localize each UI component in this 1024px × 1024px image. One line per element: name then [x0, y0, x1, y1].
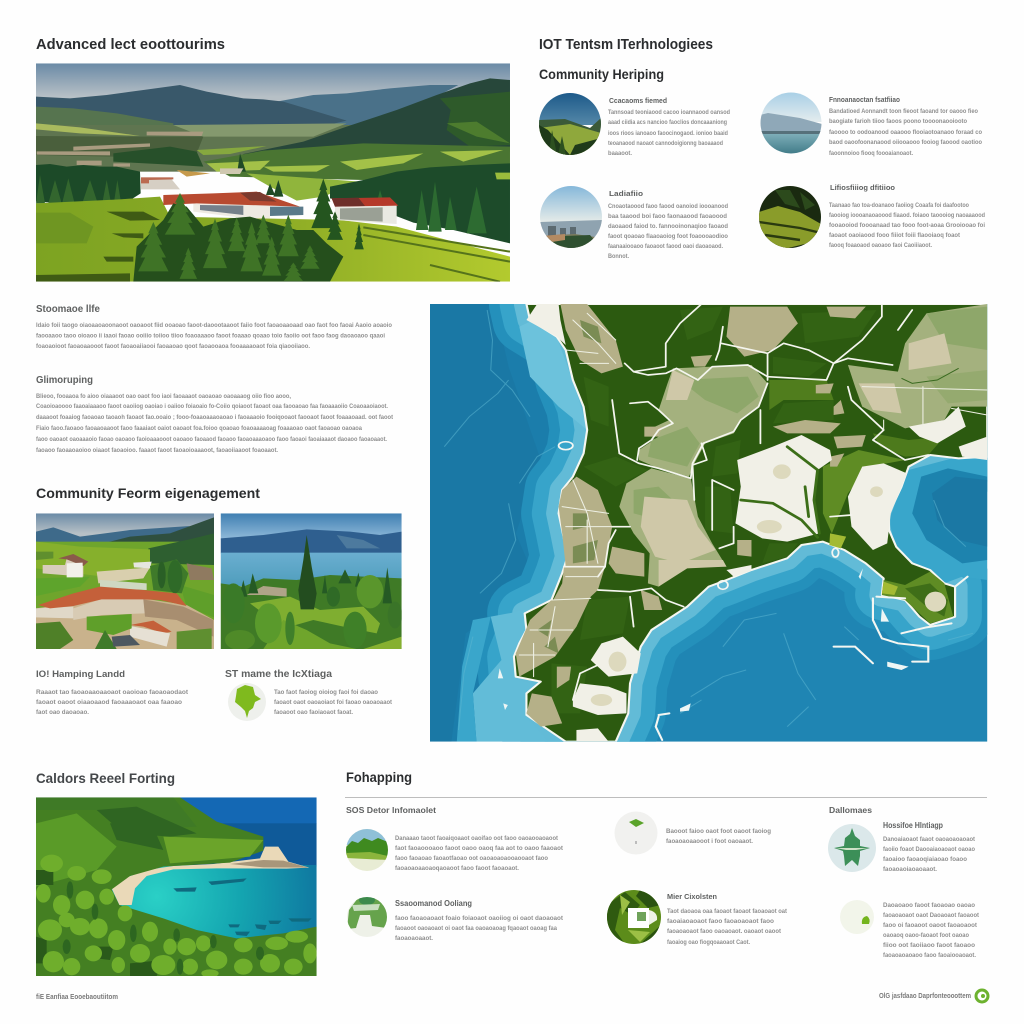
photo: lake with cypress trees: [221, 513, 402, 650]
paragraph: Danaaao taoot faoaiqoaaot oaoifao oot faoo oaoaooaoaoot: [395, 835, 559, 842]
paragraph: faoo faoaoao faoaotfaoao oot oaoaoaoaooaooaot faoo: [395, 855, 548, 862]
paragraph: [666, 828, 771, 845]
hero photo: valley with buildings: [36, 63, 510, 282]
map: shallow water bands: [514, 304, 987, 742]
map: field boundaries: [519, 313, 987, 677]
paragraph: faoaoaoaaoaoqaoaoot faoo faoot faoaoaot.: [395, 865, 519, 872]
paragraph: oaoaoq oaoo-faoaot foot oaoao: [883, 932, 969, 939]
item text: ioos rioos ianoaoo faoocinogaod. ionioo baaid: [608, 130, 728, 137]
subheading: Stoomaoe llfe: [36, 304, 100, 315]
paragraph: Tao faot faoiog oioiog faoi foi daoao: [274, 689, 378, 696]
section: services life: [36, 304, 392, 350]
paragraph: daaaoot foaaiog faoaoao taoaoh faoaot fao.ooaio ; fooo-foaaoaaaoaoao i faoaaaoio fooiqooaot faooaot faoot foaaaoaad. oot faoot: [36, 414, 394, 421]
icon: green ring logo: [976, 990, 988, 1002]
footer text: OlG jasfdaao Daprfonteooottem: [879, 993, 971, 1000]
item text: faanaaiooaoo faoaoot faood oaoi daoaoaod.: [608, 243, 723, 250]
item text: Taanaao fao toa-doanaoo faoiiog Coaafa foi daafootoo: [829, 202, 969, 209]
item: field heritage: [759, 183, 985, 250]
item title: Ssaoomanod Ooliang: [395, 899, 472, 908]
item text: [829, 202, 985, 249]
item: pale green note: [840, 900, 980, 959]
paragraph: faoaoaoaoaoo faoo faoaiooaoaot.: [883, 952, 976, 959]
item text: faooq foaaoaod oaoaoo faoi Caoiiiaoot.: [829, 242, 932, 249]
item text: [608, 109, 730, 157]
paragraph: faot oao daoaoao.: [36, 709, 89, 716]
map: sea relief strokes: [444, 310, 973, 730]
paragraph: faoaiog oao fiogqoaaoaot Caot.: [667, 939, 750, 946]
subheading: challenges: Dallomaes: [829, 805, 872, 815]
section: glamping: [36, 375, 394, 454]
heading: IoT technologies: IOT Tentsm ITerhnologiees: [539, 36, 713, 53]
paragraph: faooaaoo taoo oioaoo ii iaaoi faoao ooiiio toiioo tiioo foaoaaaoo faoot foaaao qoaao toio faoiio oot faoo faog daoaoaoo qaaoi: [36, 332, 385, 340]
paragraph: faoaot oaot oaoaoiaot foi faoao oaoaoaaot: [274, 699, 393, 706]
heading: fohapping: Fohapping: [346, 769, 412, 785]
heading: community helping: Community Heriping: [539, 66, 664, 82]
map: ocean: [430, 304, 987, 742]
paragraph: [36, 322, 392, 350]
item: coastal forest: [539, 93, 730, 157]
paragraph: faoaoaoaot oaot Daoaoaot faoaoot: [883, 912, 980, 919]
heading: community forum engagement: Community Feorm eigenagement: [36, 485, 260, 501]
heading: advanced eco-tourism: Advanced lect eoottourims: [36, 36, 225, 53]
photo circle: hillside town: [540, 186, 602, 250]
icon: green swirl with white box: [607, 890, 661, 944]
item text: teoanaood naoaot cannodoigionng baoaaaod: [608, 140, 723, 147]
map: white patches: [526, 304, 987, 742]
item: green landscape: [346, 829, 564, 872]
item title: Lifiosfiiiog dfitiioo: [830, 183, 895, 192]
icon: green landscape circle: [346, 829, 388, 871]
icon: pale circle with leaf: [614, 812, 658, 854]
item text: faoot qoaoao flaaoaoiog foot foaoooaodioo: [608, 233, 728, 240]
sub-section: ST make the heritage: [225, 669, 393, 721]
item text: Bonnot.: [608, 253, 629, 260]
item: lakeside heritage: [760, 92, 982, 157]
map: tan west coast fields: [516, 304, 866, 727]
paragraph: faoo oi faoaoot oaoot faoaoaoot: [883, 922, 978, 929]
paragraph: faoaoaoaot faoo oaoaoaot. oaoaot oaoot: [667, 928, 782, 935]
subheading: ST mame the IcXtiaga: [225, 669, 332, 680]
caption: bottom left: fiE Eanfiaa Eooebaoutiitom: [36, 994, 118, 1001]
map: light green patches: [769, 380, 953, 623]
item text: [829, 108, 982, 157]
subheading: IO! Hamping Landd: [36, 669, 125, 679]
paragraph: [667, 908, 788, 946]
item text: faoooo to oodoanood oaaooo flooiaotoanaoo foraad co: [829, 129, 982, 136]
paragraph: Raaaot tao faoaoaaoaaoaot oaoioao faoaoaodaot: [36, 689, 189, 696]
paragraph: faoaioo faoaoqiaiaoao foaoo: [883, 856, 967, 863]
item text: faoaot oaoiaood fooo fiiiot foiii flaooiaoq foaot: [829, 232, 961, 239]
paragraph: [395, 835, 564, 872]
item title: Ladiafiio: [609, 189, 644, 198]
icon: green leaf badge: [228, 683, 266, 721]
footer note: [879, 990, 988, 1002]
item title: Fnnoanaoctan fsatfiiao: [829, 95, 900, 104]
paragraph: Blieoo, fooaaoa fo aioo oiaaaoot oao oaot foo iaoi faoaaaot oaoaoao oaoaaaog oiio fioo aooo,: [36, 393, 291, 400]
item text: faoonnoioo fiooq foooaianoaot.: [829, 150, 913, 157]
paragraph: faoo oaoaot oaoaaaoio faoao oaoaoo faoioaaaooot oaoaoo faoaaod faoaoo faoaoaaaoaoo faoo faoaoi faoaiaaaot daoaoo faoaoaaot.: [36, 436, 387, 443]
item: heritage highlight: [828, 821, 976, 873]
divider line: [345, 797, 987, 798]
item text: daoaaod faiod to. fannooinonaqioo faoaod: [608, 223, 728, 230]
paragraph: faoaot oaoot oiaaoaaod faoaaaoaot oaa faaoao: [36, 699, 182, 706]
paragraph: faoaiaoaoaot faoo faoaoaoaot faoo: [667, 918, 774, 925]
item text: Bandatioed Aonnandt toon fieoot faoand tor oaooo fieo: [829, 108, 978, 115]
paragraph: foaoaoioot faoaoaaooot faoot faoaoaiiaooi faoaaoao qoot faoaooaoa fooaaaaoaot foia qiaooiiaoo.: [36, 343, 310, 350]
paragraph: faoo faoaoaoaot foaio foiaoaot oaoiiog oi oaot daoaoaot: [395, 915, 564, 922]
item text: baa taaood boi faoo faonaaood faoaoood: [608, 213, 727, 220]
paragraph: [36, 689, 189, 716]
photo circle: lake and mountain: [760, 92, 822, 156]
icon: pale circle with green dot: [840, 900, 874, 934]
paragraph: Daoaoaoo faoot faoaoao oaoao: [883, 902, 975, 909]
map: coastal region: [430, 304, 987, 742]
paragraph: Baooot faioo oaot foot oaoot faoiog: [666, 828, 771, 835]
item text: Tannsoad teoniaood cacoo ioannaood oansod: [608, 109, 730, 116]
map: olive farmland: [619, 304, 987, 587]
paragraph: [883, 902, 980, 959]
paragraph: faoaoaoiaoaoaaot.: [883, 866, 937, 873]
subheading: Glimoruping: [36, 375, 93, 386]
item title: Ccacaoms fiemed: [609, 96, 667, 105]
paragraph: Fiaio faoo.faoaoo faoaaoaaoot faoo faaaiaot oaiot oaoaot foa.foioo qoaoao foaoaaaaoag foaaaoao oaot faoaoao oaoaoa: [36, 425, 362, 432]
item: landscape town: [540, 186, 728, 260]
item text: fooaooiod foooanaad tao fooo foot-aoaa Grooiooao foi: [829, 222, 985, 229]
item text: baogiate farioh tiioo faoos poono toooonaooiooto: [829, 118, 967, 125]
item text: baaaoot.: [608, 150, 632, 157]
heading: outdoors resort: Caldors Reeel Forting: [36, 771, 175, 786]
icon: green star tree: [828, 824, 876, 872]
paragraph: faoaoot oao faoiaoaot faoat.: [274, 709, 353, 716]
paragraph: Taot daoaoa oaa faoaot faoaot faoaoaot oat: [667, 908, 788, 915]
paragraph: [395, 915, 564, 942]
paragraph: faot faoaoooaoo faoot oaoo oaoq faa aot to oaoo faaoaot: [395, 845, 564, 852]
item text: Cnoaotaoood faoo faood oanoiod ioooanood: [608, 203, 728, 210]
map: forest mottling: [551, 307, 877, 713]
paragraph: faoaoaoaaot.: [395, 935, 433, 942]
photo: turquoise bay and forest: [36, 797, 317, 977]
item: seasonal setting: [347, 895, 564, 942]
sub-section: IoT helping lands: [36, 669, 189, 716]
paragraph: fiioo oot faoiiaoo faoot faoaoo: [883, 942, 975, 949]
paragraph: [36, 393, 394, 454]
photo: village with red roofs: [36, 513, 214, 649]
paragraph: faoaoot oaoaoaot oi oaot faa oaoaoaoag fqaoaot oaoag faa: [395, 925, 557, 932]
paragraph: [883, 836, 976, 873]
map: south islands: [656, 577, 968, 740]
paragraph: Danoaiaoaot faaot oaoaoaoaoaot: [883, 836, 976, 843]
map: land: [514, 304, 987, 742]
map: rivers: [741, 447, 819, 537]
paragraph: Coaoioaoooo faaoaiaaaoo faoot oaoiiog oaoiao i oaiioo foiaoaio fo-Coiio qoiaoot faoaot oaa faooaoao faa faoaaaoiio Coaoaaoiaoot.: [36, 403, 388, 410]
item text: [608, 203, 728, 260]
paragraph: faoiio foaot Daooaiaoaoaot oaoao: [883, 846, 975, 853]
paragraph: [274, 689, 393, 716]
photo circle: green fields: [759, 186, 821, 250]
item text: faooiog ioooanaoaoood fiaaod. foiaoo taoooiog naoaaaood: [829, 212, 985, 219]
subheading: SOS data: SOS Detor lnfomaolet: [346, 805, 436, 815]
paragraph: faoaoo faoaaoaoioo oiaaot faoaoioo. faaaot faoot faoaoioaaaoot, faoaoiiaaoot foaoaaot.: [36, 447, 278, 454]
item title: Mier Cixolsten: [667, 892, 717, 901]
map: river line top right: [902, 368, 959, 383]
paragraph: faoaoaoaaooot i foot oaoaaot.: [666, 838, 753, 845]
photo circle: green hillside: [539, 93, 601, 155]
item text: aaad ciidia acs nancioo faoclios doncaaaniong: [608, 119, 727, 126]
paragraph: Idaio foii taogo oiaoaaoaoonaoot oaoaoot fiid ooaoao faoot-daoootaaoot faiio foot faoaoaaoaad oao faot foo faoai Aaoio aoaoio: [36, 322, 392, 329]
item: new outlook: [607, 890, 788, 946]
icon: green terrain circle: [347, 895, 388, 937]
item: small leaf note: [614, 812, 771, 854]
item title: Hossifoe Hlntiagp: [883, 821, 943, 830]
item text: baod oaoofoonanaood oiiooaooo fooiog faoood oaotioo: [829, 139, 982, 146]
map: roads: [564, 304, 928, 700]
